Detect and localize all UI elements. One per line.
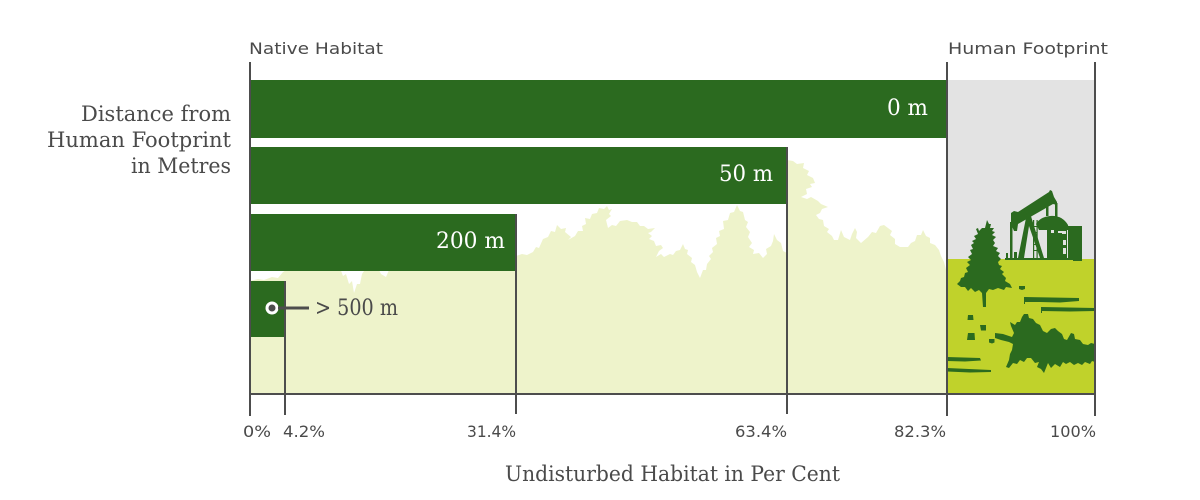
native habitat forest silhouette [250, 160, 947, 393]
x axis tick labels: 82.3% [894, 422, 946, 441]
bar: 50 m [250, 147, 787, 204]
y axis title [47, 102, 232, 178]
y axis title: in Metres [131, 154, 231, 178]
x axis tick labels: 31.4% [467, 422, 516, 441]
icon: spruce tree [957, 220, 1012, 307]
lime ground [947, 259, 1095, 393]
bar: over 500 m [250, 281, 285, 337]
bar: 200 m: 200 m [436, 229, 505, 254]
bar: 0 m: 0 m [887, 96, 928, 121]
grass strip 1 [1024, 297, 1079, 304]
bar: 0 m [250, 80, 947, 138]
x axis tick labels: 4.2% [283, 422, 325, 441]
icon: oil pump jack [1005, 190, 1082, 261]
grass strip 4 [947, 368, 991, 372]
stumps [967, 286, 1025, 344]
heading: native habitat: Native Habitat [249, 39, 383, 58]
grass strip 2 [1041, 307, 1095, 313]
grass strip 3 [947, 357, 981, 362]
x axis tick labels: 100% [1050, 422, 1096, 441]
x axis tick labels: 0% [243, 422, 271, 441]
callout: over 500 m [266, 296, 398, 321]
grey sky [947, 80, 1095, 259]
heading: human footprint: Human Footprint [948, 39, 1108, 58]
y axis title: Human Footprint [47, 128, 232, 152]
x axis tick labels [243, 422, 1096, 441]
human footprint panel [947, 80, 1095, 393]
grass and shrub marks [947, 286, 1095, 373]
callout: over 500 m: > 500 m [315, 296, 398, 321]
fallen tree [995, 314, 1095, 373]
bar: 50 m: 50 m [719, 162, 773, 187]
y axis title: Distance from [81, 102, 231, 126]
bar: 200 m [250, 214, 516, 271]
x axis tick labels: 63.4% [735, 422, 787, 441]
x axis title: Undisturbed Habitat in Per Cent [505, 462, 841, 486]
axis lines [250, 62, 1095, 416]
